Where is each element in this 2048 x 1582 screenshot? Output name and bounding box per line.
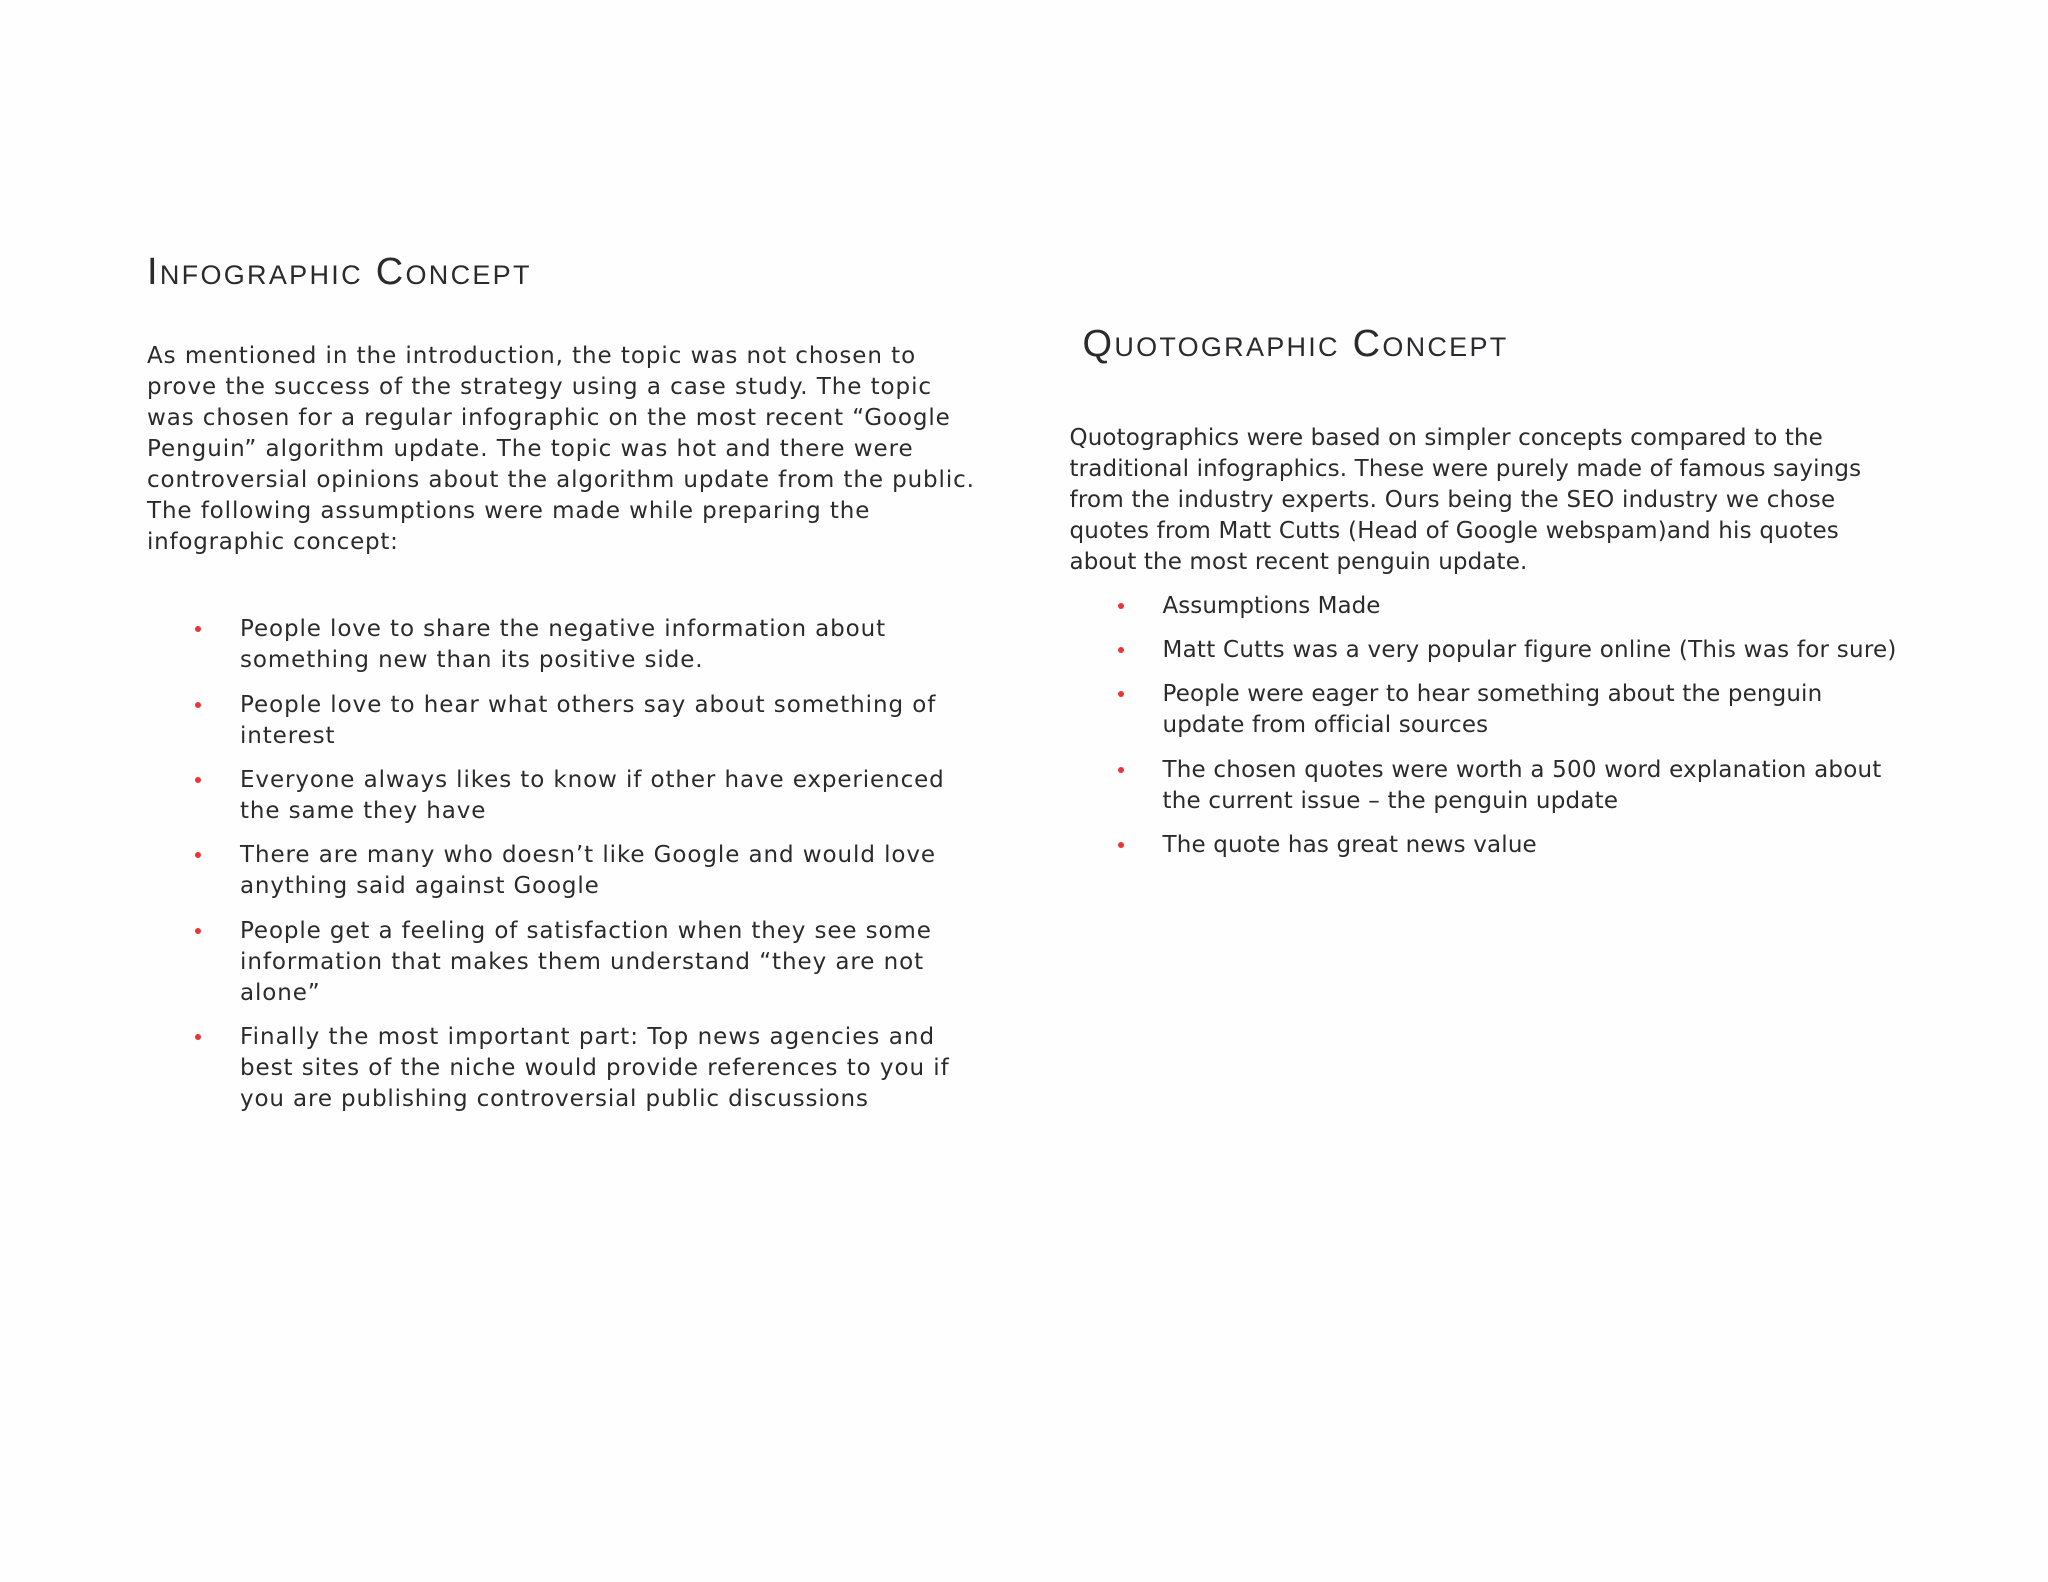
intro paragraph: prove the success of the strategy using a case study. The topic [147,374,932,400]
bullet: official sources [1118,681,1822,738]
bullet: 500 word explanation [1118,757,1882,814]
bullet: not alone: alone” [240,980,321,1006]
bullet: not alone: information that makes them understand “they are not [240,949,924,975]
bullet: official sources: People were eager to hear something about the penguin [1162,681,1822,707]
bullet: not alone: People get a feeling of satisfaction when they see some [240,918,932,944]
bullet: assumptions made: Assumptions Made [1162,593,1380,619]
bullet: against Google: anything said against Google [240,873,600,899]
intro paragraph: was chosen for a regular infographic on the most recent “Google [147,405,951,431]
bullet: others have experienced [195,767,945,824]
bullet: Matt Cutts popular: Matt Cutts was a very popular figure online (This was for sure) [1162,637,1897,663]
panel: quotographic concept [1070,323,1897,858]
bullet: 500 word explanation: The chosen quotes were worth a 500 word explanation about [1162,757,1882,783]
heading: quotographic concept: Quotographic Concept [1082,323,1508,365]
bullet: others have experienced: Everyone always likes to know if other have experienced [240,767,945,793]
bullet: 500 word explanation: the current issue – the penguin update [1162,788,1618,814]
bullet: negative information [195,616,886,673]
quotographic paragraph: from the industry experts. Ours being the SEO industry we chose [1070,487,1835,513]
quotographic paragraph: about the most recent penguin update. [1070,549,1527,575]
bullet: negative information: something new than its positive side. [240,647,703,673]
quotographic paragraph [1070,425,1861,575]
quotographic paragraph: Quotographics were based on simpler concepts compared to the [1070,425,1823,451]
heading: infographic concept: Infographic Concept [147,251,532,293]
bullet: official sources: update from official sources [1162,712,1488,738]
intro paragraph: infographic concept: [147,529,399,555]
bullet: negative information: People love to share the negative information about [240,616,886,642]
bullet: hear what others say: People love to hear what others say about something of [240,692,936,718]
intro paragraph: controversial opinions about the algorithm update from the public. [147,467,975,493]
intro paragraph: Penguin” algorithm update. The topic was hot and there were [147,436,914,462]
intro paragraph: As mentioned in the introduction, the topic was not chosen to [147,343,916,369]
bullet: references from news agencies: best sites of the niche would provide references to you if [240,1055,950,1081]
bullet: hear what others say [195,692,936,749]
bullet: hear what others say: interest [240,723,335,749]
intro paragraph: The following assumptions were made while preparing the [147,498,870,524]
bullet: references from news agencies [195,1024,950,1112]
bullet: references from news agencies: Finally the most important part: Top news agencies and [240,1024,935,1050]
quotographic paragraph: traditional infographics. These were purely made of famous sayings [1070,456,1861,482]
panel: infographic concept [146,251,975,1112]
bullet: not alone [195,918,932,1006]
intro paragraph [146,343,975,555]
bullet: others have experienced: the same they have [240,798,486,824]
quotographic paragraph: quotes from Matt Cutts (Head of Google webspam)and his quotes [1070,518,1839,544]
bullet: references from news agencies: you are publishing controversial public discussions [240,1086,869,1112]
bullet: against Google [195,842,936,899]
bullet: news value: The quote has great news value [1162,832,1537,858]
bullet: against Google: There are many who doesn’t like Google and would love [240,842,936,868]
